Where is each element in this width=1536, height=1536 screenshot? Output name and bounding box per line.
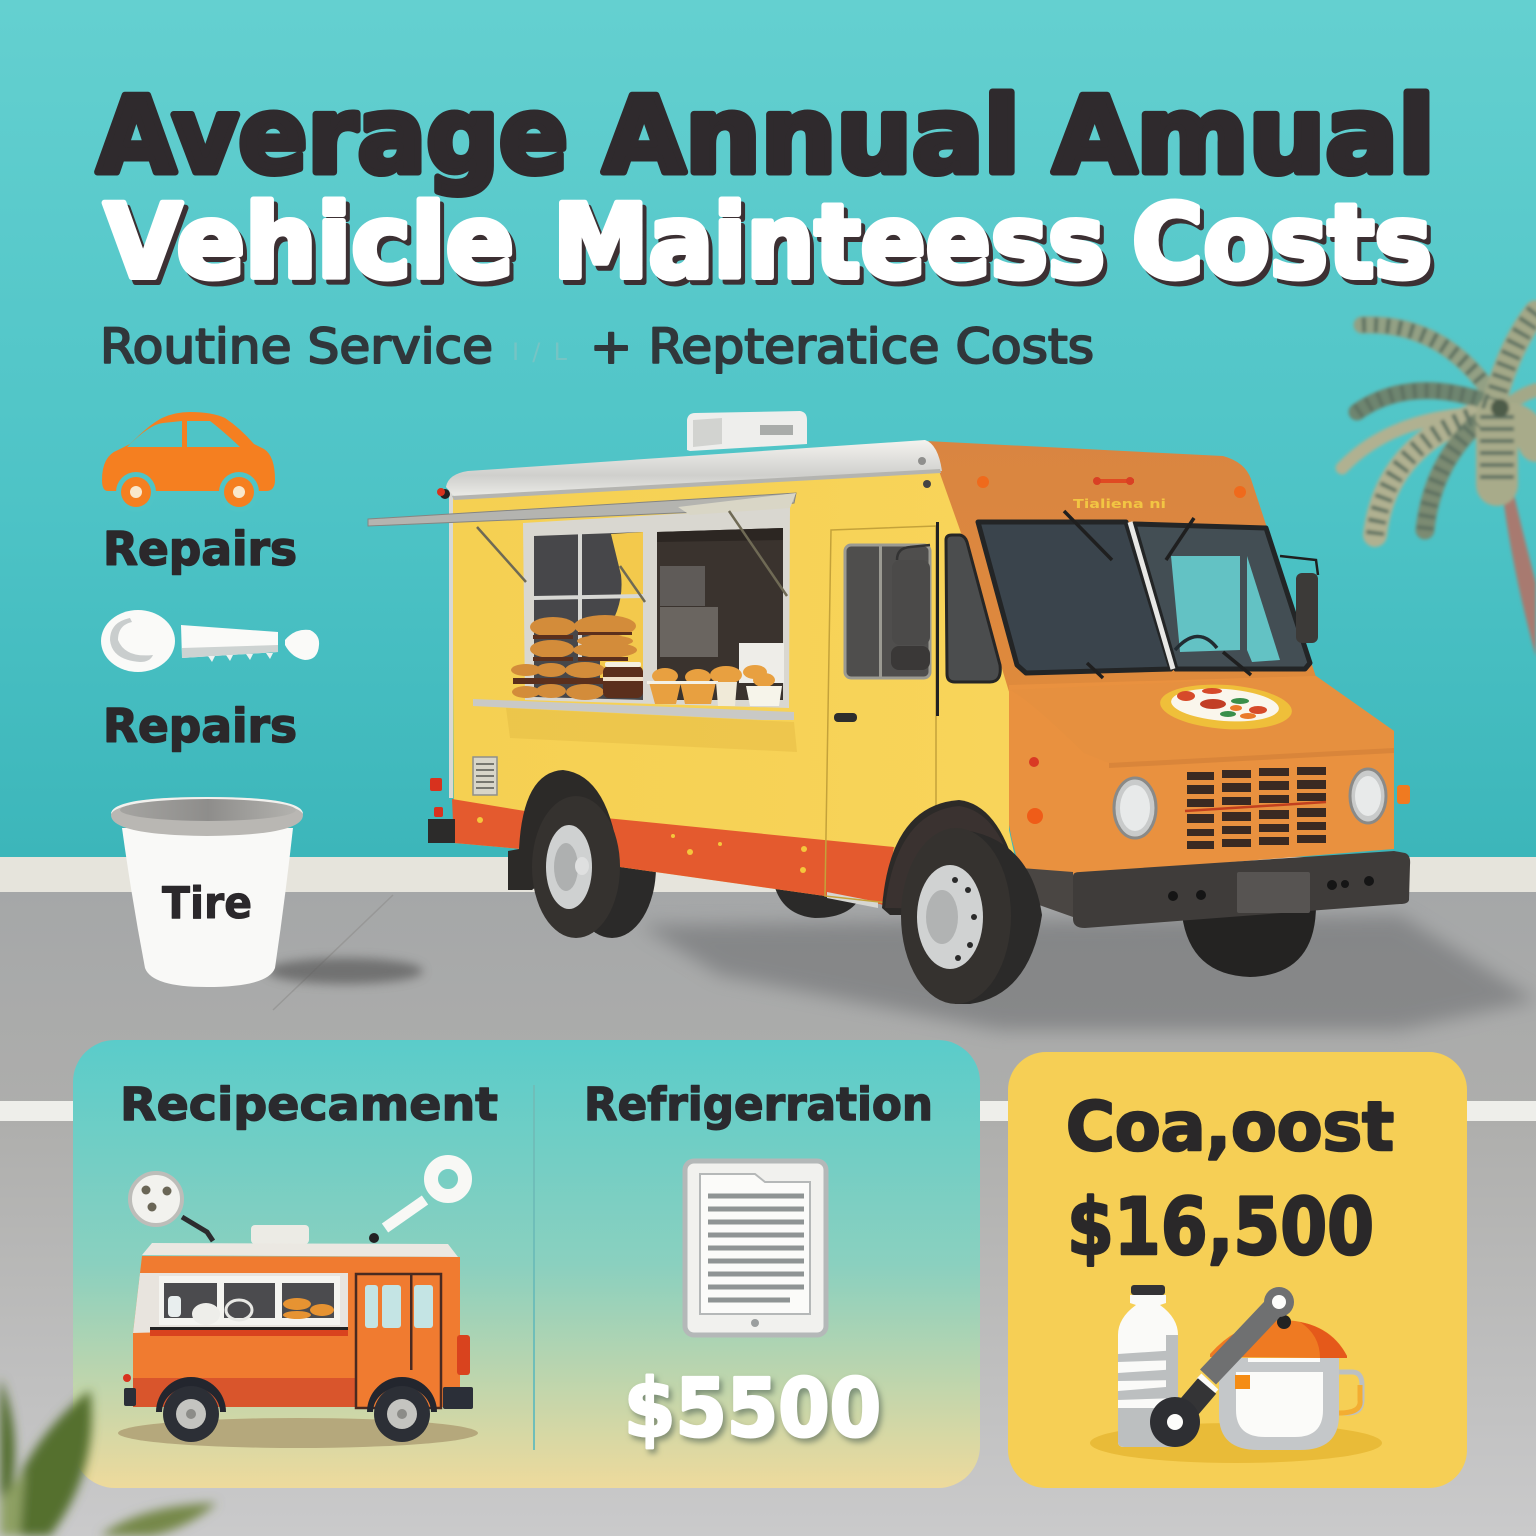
cab sign and marker lights <box>977 476 1410 824</box>
bus shadow <box>118 1418 478 1448</box>
heading: refrigeration: Refrigerration <box>584 1078 933 1131</box>
shadow: bucket <box>267 958 423 984</box>
subtitle: Routine Service <box>100 319 493 375</box>
air conditioner <box>687 411 807 451</box>
subtitle: I / L <box>512 338 568 366</box>
palm trunk <box>1502 490 1536 657</box>
cab door <box>825 526 936 903</box>
title line 2 <box>104 183 1432 302</box>
far front wheel <box>1182 905 1316 977</box>
right mirror <box>1296 573 1318 643</box>
cab roof and pillar <box>926 441 1317 695</box>
baseboard <box>0 857 1536 893</box>
panel: replacement and refrigeration <box>73 1040 980 1488</box>
title line 1: Annual <box>603 75 1020 197</box>
icon: white wrench <box>101 610 319 672</box>
yellow box body <box>452 468 1020 904</box>
serving window <box>523 507 790 708</box>
icon: tablet document <box>685 1161 826 1335</box>
roof trim <box>446 440 942 500</box>
label: repairs 1: Repairs <box>103 522 297 576</box>
subtitle <box>100 319 1094 375</box>
bucket label: Tire <box>162 878 252 929</box>
door window <box>845 545 930 678</box>
serving shelf <box>473 699 797 752</box>
bottle <box>1118 1285 1178 1447</box>
palm tree <box>1342 312 1536 657</box>
title line 2: Costs <box>1132 183 1432 302</box>
floor <box>0 892 1536 1536</box>
food display <box>511 615 782 706</box>
grille <box>1185 767 1326 849</box>
headlights <box>1114 769 1386 838</box>
wrench <box>1150 1287 1294 1447</box>
icon: bottle, wrench and pot <box>1090 1285 1382 1463</box>
panel: total cost <box>1008 1052 1467 1488</box>
awning <box>368 493 796 602</box>
cab sign and marker lights: Tialiena ni <box>1073 497 1166 511</box>
figure: 5500: $5500 <box>624 1362 881 1455</box>
front wheel <box>882 800 1042 1004</box>
heading: cost: Coa,oost <box>1066 1088 1394 1167</box>
windshield left <box>978 522 1171 673</box>
subtitle: + Repteratice Costs <box>590 319 1094 375</box>
palm fronds <box>1342 312 1536 535</box>
foreground plant <box>0 1378 217 1536</box>
rear edge strip <box>449 490 453 798</box>
title line 2: Vehicle <box>104 183 514 302</box>
label: repairs 2: Repairs <box>103 699 297 753</box>
door handle <box>834 713 857 722</box>
truck ground shadow <box>640 915 1536 1030</box>
mid underbody wheel <box>773 880 863 918</box>
title <box>97 75 1435 302</box>
icon: small orange bus <box>118 1162 478 1448</box>
key tool <box>369 1162 465 1243</box>
wipers, pillar and steering wheel <box>1064 511 1318 678</box>
door rail <box>936 522 939 716</box>
magnifier tool <box>130 1173 213 1241</box>
pot <box>1210 1315 1362 1450</box>
bumper <box>1021 851 1410 928</box>
rear wheel <box>508 770 620 938</box>
side cab window <box>946 535 1000 682</box>
side mirror <box>891 545 930 670</box>
orange front and side <box>1009 676 1394 878</box>
figure: 16,500: $16,500 <box>1067 1183 1374 1273</box>
yellow flecks <box>477 817 807 873</box>
orange hood <box>1010 676 1394 763</box>
silver sill <box>827 892 878 908</box>
title line 2: Mainteess <box>553 183 1105 302</box>
food truck <box>368 411 1410 1004</box>
panel divider <box>533 1085 535 1450</box>
title line 1: Average <box>97 75 568 197</box>
pizza decal <box>1159 680 1293 734</box>
red lower stripe <box>452 799 894 906</box>
icon: tire bucket <box>111 797 303 987</box>
icon: orange car <box>102 412 275 512</box>
title line 1: Amual <box>1053 75 1435 197</box>
windshield right <box>1134 524 1310 669</box>
hood highlight <box>1109 748 1394 768</box>
title line 1 <box>97 75 1435 197</box>
heading: replacement: Recipecament <box>120 1078 498 1131</box>
rear wheel tread <box>568 796 656 938</box>
rear vent and lights <box>428 488 497 843</box>
background wall <box>0 0 1536 858</box>
